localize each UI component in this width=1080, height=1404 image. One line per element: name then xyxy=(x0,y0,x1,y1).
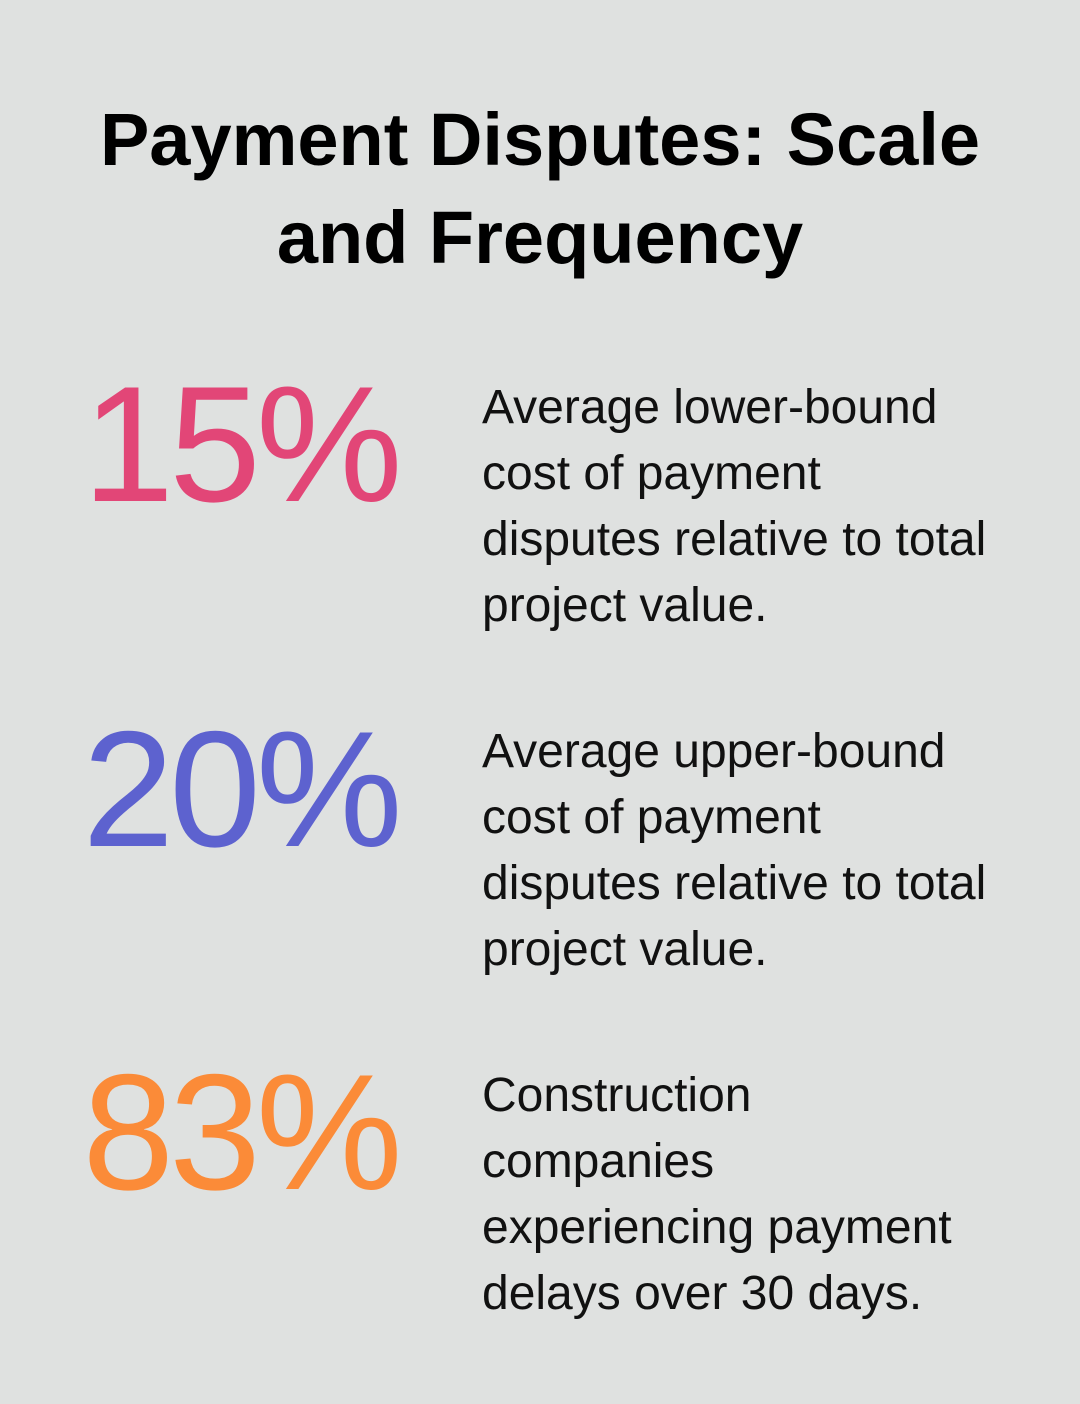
stat 3 description xyxy=(482,1069,952,1320)
title xyxy=(100,98,980,279)
title: and Frequency xyxy=(277,196,803,279)
stat 3 number: 83% xyxy=(82,1040,398,1224)
stat 2 description: disputes relative to total xyxy=(482,857,986,910)
stat 1 description: cost of payment xyxy=(482,447,821,500)
stat 3 description: companies xyxy=(482,1135,714,1188)
stat 3 description: delays over 30 days. xyxy=(482,1267,922,1320)
stat 1 description: Average lower-bound xyxy=(482,381,937,434)
stat 3 description: experiencing payment xyxy=(482,1201,952,1254)
stat 1 number: 15% xyxy=(82,352,398,536)
stat 2 description xyxy=(482,725,986,976)
stat 1 description: disputes relative to total xyxy=(482,513,986,566)
stat 2 description: Average upper-bound xyxy=(482,725,945,778)
stat 3 description: Construction xyxy=(482,1069,751,1122)
stat 1 description xyxy=(482,381,986,632)
stat 2 number: 20% xyxy=(82,697,398,881)
stat 1 description: project value. xyxy=(482,579,768,632)
title: Payment Disputes: Scale xyxy=(100,98,980,181)
stat 2 description: cost of payment xyxy=(482,791,821,844)
stat 2 description: project value. xyxy=(482,923,768,976)
